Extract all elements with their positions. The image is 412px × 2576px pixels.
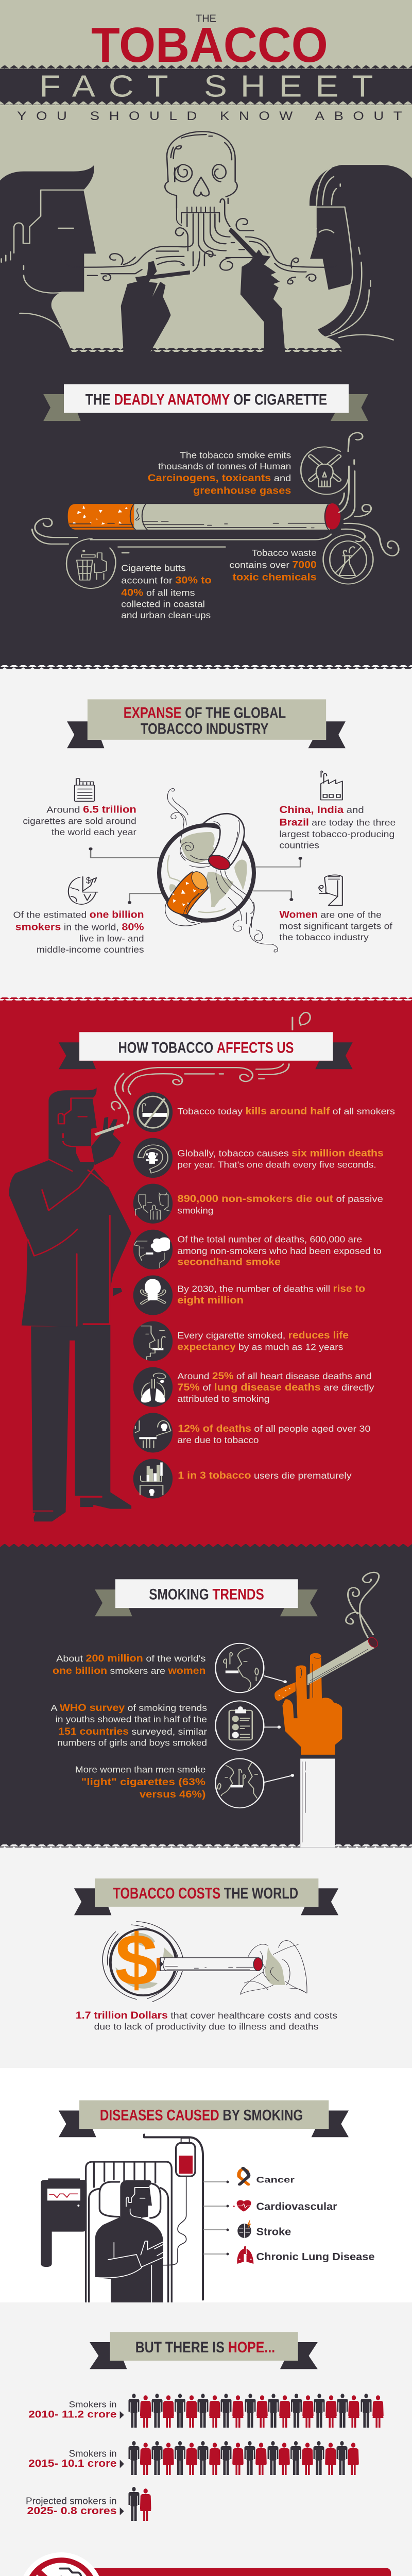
callout banner xyxy=(87,2568,391,2576)
label: projected smokers 2025: Projected smokers in xyxy=(26,2496,117,2506)
icon: deaths from smoking xyxy=(133,1413,173,1453)
icon: passive smoking people xyxy=(133,1184,173,1224)
illustration: hand holding cigarette xyxy=(274,1636,380,1848)
text: heart and lung disease: Around 25% of all heart disease deaths and xyxy=(177,1371,371,1382)
text: rise to eight million: eight million xyxy=(177,1295,244,1306)
icon: bar chart and skull xyxy=(133,1459,173,1499)
text: WHO survey: in youths showed that in half of the xyxy=(56,1715,207,1724)
text: secondhand smoke: Of the total number of deaths, 600,000 are xyxy=(177,1234,362,1245)
text: producing countries xyxy=(279,804,396,851)
icon: secondhand smoke xyxy=(133,1230,173,1269)
icon: skull and crossbones xyxy=(133,1275,173,1315)
label: projected smokers 2025: 2025- 0.8 crores xyxy=(27,2505,117,2517)
text: one billion smokers: live in low- and xyxy=(79,934,144,944)
panel: footer xyxy=(0,2552,412,2576)
text: 12 percent of deaths: are due to tobacco xyxy=(177,1435,259,1445)
text: 12 percent of deaths: 12% of deaths of all people aged over 30 xyxy=(178,1423,370,1434)
label: smokers in 2010: 2010- 11.2 crore xyxy=(28,2409,117,2420)
heading ribbon: TOBACCO INDUSTRY xyxy=(141,720,268,737)
text: secondhand smoke xyxy=(177,1234,382,1267)
text: cardiovascular: Cardiovascular xyxy=(256,2200,337,2212)
illustration: globe dollar and cigarette xyxy=(102,1920,263,2002)
text: tobacco waste: contains over 7000 xyxy=(229,560,317,570)
illustration: lungs and heart xyxy=(240,1941,307,1994)
panel: title header xyxy=(0,0,412,355)
label: smokers in 2010: Smokers in xyxy=(69,2400,117,2410)
text: $ mark in globe icon: $ xyxy=(86,876,91,886)
cigarette illustration xyxy=(68,503,340,530)
text: women targets xyxy=(279,909,392,942)
panel: but there is hope xyxy=(0,2302,412,2576)
text: heart and lung disease: 75% of lung disease deaths are directly xyxy=(177,1382,374,1393)
text: WHO survey: A WHO survey of smoking trends xyxy=(50,1702,207,1713)
icon: woman smoking profile xyxy=(319,875,342,905)
text: producing countries: Brazil are today the three xyxy=(279,817,396,828)
text: rise to eight million xyxy=(177,1284,365,1306)
title: THE xyxy=(196,12,216,24)
panel: tobacco costs the world xyxy=(0,1844,412,2068)
illustration: hospital patient xyxy=(41,2134,203,2303)
text: producing countries: China, India and xyxy=(279,804,364,815)
panel: smoking trends xyxy=(0,1544,412,1851)
text: 1 in 3 users: 1 in 3 tobacco users die prematurely xyxy=(178,1470,352,1481)
illustration: smoke skull xyxy=(67,131,336,284)
heading ribbon: THE DEADLY ANATOMY OF CIGARETTE xyxy=(85,391,327,408)
text: non-smokers die xyxy=(177,1193,383,1216)
text: stroke: Stroke xyxy=(256,2226,291,2238)
heading ribbon: HOW TOBACCO AFFECTS US xyxy=(118,1039,294,1056)
text: heart and lung disease xyxy=(177,1371,374,1404)
connector lines xyxy=(91,849,300,903)
text: tobacco smoke emissions xyxy=(148,450,291,496)
people row: 2010 xyxy=(129,2394,384,2428)
connector lines xyxy=(203,2182,227,2254)
people row: 2025 xyxy=(129,2487,151,2521)
text: 6.5 trillion xyxy=(23,804,136,837)
text: kills around half: Tobacco today kills around half of all smokers xyxy=(177,1106,395,1116)
text: non-smokers die: smoking xyxy=(177,1206,213,1216)
icon: trash bin and hand xyxy=(66,539,115,588)
text: 1.7 trillion dollars: due to lack of productivity due to illness and deaths xyxy=(94,2022,318,2032)
globe and cigarette illustration xyxy=(159,789,254,927)
text: WHO survey xyxy=(50,1702,207,1748)
label: smokers in 2015: Smokers in xyxy=(69,2448,117,2459)
connector dots xyxy=(227,2180,229,2256)
text: light cigarettes: "light" cigarettes (63% xyxy=(81,1776,205,1787)
heading ribbon xyxy=(59,1032,353,1069)
icon: brain with bolt xyxy=(237,2219,251,2238)
icon: factory xyxy=(321,771,342,800)
icon: life expectancy xyxy=(133,1321,173,1361)
illustration: woman smoking xyxy=(229,165,412,353)
text: 200 million women xyxy=(53,1653,205,1676)
text: one billion smokers xyxy=(13,909,144,955)
title: FACT SHEET xyxy=(40,70,373,104)
text: 6.5 trillion: cigarettes are sold around xyxy=(23,816,136,826)
text: 6.5 trillion: the world each year xyxy=(52,827,136,837)
heading ribbon: DISEASES CAUSED BY SMOKING xyxy=(100,2107,303,2124)
icon: no smoking sign xyxy=(19,2552,104,2576)
text: rise to eight million: By 2030, the number of deaths will rise to xyxy=(177,1284,365,1295)
smoke swirls xyxy=(111,1012,310,1124)
icon: globe with growth arrow xyxy=(68,877,98,904)
icon: lungs xyxy=(133,1367,173,1407)
text: six million deaths: Globally, tobacco causes six million deaths xyxy=(177,1147,384,1159)
icon: heart xyxy=(233,2200,251,2212)
heading ribbon: TOBACCO COSTS THE WORLD xyxy=(113,1885,298,1902)
torn dark band behind FACT SHEET xyxy=(0,65,412,105)
people row: 2015 xyxy=(129,2441,359,2475)
panel: diseases caused by smoking xyxy=(0,2068,412,2303)
text: one billion smokers: Of the estimated one billion xyxy=(13,909,144,920)
text: one billion smokers: middle-income countries xyxy=(37,945,144,955)
icon: no smoking xyxy=(133,1092,173,1132)
text: tobacco smoke emissions: Carcinogens, toxicants and xyxy=(148,472,291,483)
text: cigarette butts xyxy=(121,563,212,620)
text: one billion smokers: smokers in the world, 80% xyxy=(15,922,144,933)
text: women targets: Women are one of the xyxy=(279,909,382,920)
panel: deadly anatomy of cigarette xyxy=(0,348,412,671)
icon: no chemicals flask xyxy=(323,535,373,584)
text: tobacco waste: Tobacco waste xyxy=(252,548,317,558)
panel: how tobacco affects us xyxy=(0,997,412,1549)
text: tobacco waste: toxic chemicals xyxy=(233,571,317,583)
icon: survey clipboard circle xyxy=(215,1701,280,1750)
text: WHO survey: 151 countries surveyed, similar xyxy=(58,1726,207,1737)
title: YOU SHOULD KNOW ABOUT xyxy=(17,110,402,123)
label: projected smokers 2025 xyxy=(26,2496,124,2517)
text: 200 million women: About 200 million of the world's xyxy=(56,1653,205,1664)
text: tobacco waste xyxy=(229,548,317,583)
text: six million deaths xyxy=(177,1147,384,1170)
text: tobacco smoke emissions: greenhouse gases xyxy=(193,485,291,496)
text: cigarette butts: account for 30% to xyxy=(121,574,212,586)
smoke swirls xyxy=(32,433,399,556)
text: secondhand smoke: secondhand smoke xyxy=(177,1257,281,1267)
text: cancer: Cancer xyxy=(256,2175,295,2185)
heading ribbon xyxy=(67,699,346,748)
text: 6.5 trillion: Around 6.5 trillion xyxy=(46,804,136,815)
text: 1.7 trillion dollars xyxy=(76,2010,337,2032)
text: reduces life expectancy: Every cigarette smoked, reduces life xyxy=(177,1330,349,1341)
panel: expanse of the global tobacco industry xyxy=(0,665,412,1004)
text: cigarette butts: 40% of all items xyxy=(121,587,195,598)
illustration: man smoking xyxy=(0,165,190,353)
text: 200 million women: one billion smokers are women xyxy=(53,1665,205,1676)
label: smokers in 2010 xyxy=(28,2400,124,2420)
heading ribbon xyxy=(74,1878,338,1915)
smoke xyxy=(346,1572,379,1637)
text: women targets: the tobacco industry xyxy=(279,933,369,942)
title xyxy=(17,12,402,123)
text: reduces life expectancy: expectancy by as much as 12 years xyxy=(177,1342,343,1352)
illustration: smoking man xyxy=(9,1087,131,1521)
text: cigarette butts: collected in coastal xyxy=(121,599,205,609)
label: smokers in 2015: 2015- 10.1 crore xyxy=(28,2458,117,2469)
icon: cigarette pack xyxy=(75,778,94,801)
title: TOBACCO xyxy=(91,17,328,73)
text: cigarette butts: Cigarette butts xyxy=(121,563,186,573)
heading ribbon xyxy=(43,384,368,421)
icon: skull and crossbones xyxy=(301,447,348,494)
illustration: globe dollar and cigarette: $ xyxy=(115,1920,158,2001)
heading ribbon xyxy=(90,2332,318,2369)
heading ribbon: BUT THERE IS HOPE... xyxy=(135,2339,275,2356)
text: tobacco smoke emissions: The tobacco smoke emits xyxy=(180,450,291,461)
text: reduces life expectancy xyxy=(177,1330,349,1352)
heading ribbon xyxy=(59,2100,349,2137)
icon: men and women circle xyxy=(215,1759,294,1808)
text: 1.7 trillion dollars: 1.7 trillion Dollars that cover healthcare costs and costs xyxy=(76,2010,337,2021)
icon: lungs xyxy=(237,2246,253,2264)
text: light cigarettes: More women than men smoke xyxy=(75,1765,205,1775)
smoke tail under globe xyxy=(233,903,278,952)
icon: cancer ribbon xyxy=(239,2168,249,2184)
heading ribbon: EXPANSE OF THE GLOBAL xyxy=(124,704,286,722)
icon: skull dial xyxy=(133,1138,173,1178)
text: cigarette butts: and urban clean-ups xyxy=(121,611,211,620)
label: smokers in 2015 xyxy=(28,2448,124,2469)
text: 12 percent of deaths xyxy=(177,1423,370,1445)
text: producing countries: countries xyxy=(279,840,319,851)
icon: woman smoking circle xyxy=(215,1643,286,1692)
text: non-smokers die: 890,000 non-smokers die out of passive xyxy=(177,1193,383,1204)
text: heart and lung disease: attributed to smoking xyxy=(177,1394,269,1404)
heading ribbon: SMOKING TRENDS xyxy=(149,1586,264,1603)
text: light cigarettes xyxy=(75,1765,205,1800)
text: tobacco smoke emissions: thousands of tonnes of Human xyxy=(158,462,291,471)
text: light cigarettes: versus 46%) xyxy=(140,1789,205,1800)
text: WHO survey: numbers of girls and boys smoked xyxy=(57,1738,207,1748)
heading ribbon xyxy=(95,1579,318,1616)
